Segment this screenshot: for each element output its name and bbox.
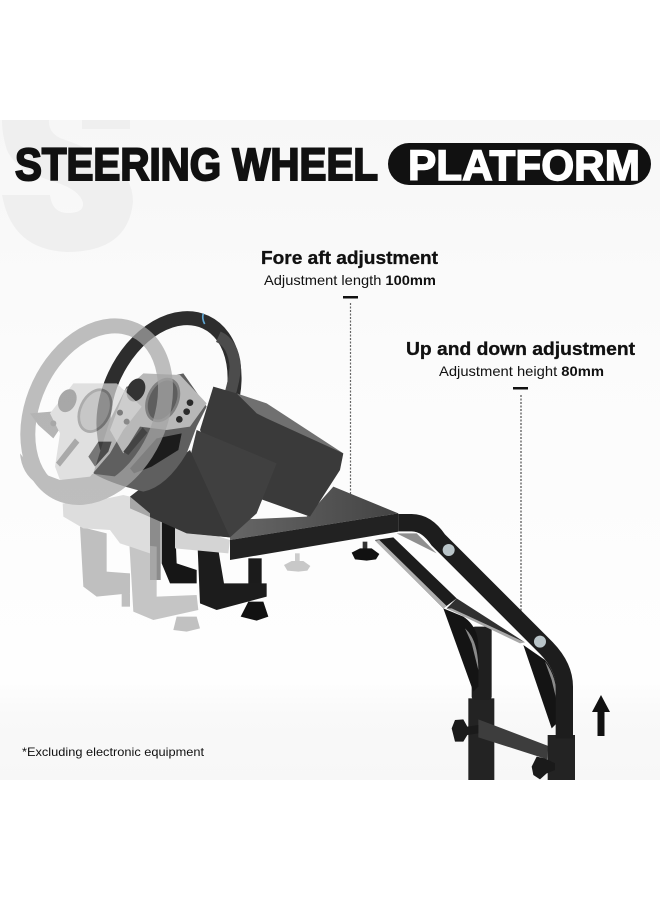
ghost base — [63, 495, 150, 553]
callout: fore aft adjustment: Adjustment length 100mm — [264, 272, 436, 288]
dark wheel hub — [93, 373, 207, 492]
callout: fore aft adjustment — [261, 248, 438, 500]
background panel — [0, 120, 660, 780]
ghost wheel — [1, 303, 200, 632]
motor housing — [130, 387, 343, 537]
rim highlights — [203, 313, 235, 417]
bolts — [443, 544, 546, 648]
ghost rim — [1, 303, 192, 520]
callout: fore aft adjustment: Fore aft adjustment — [261, 248, 438, 268]
ghost clamps — [80, 527, 200, 632]
heading pill: platform: PLATFORM — [408, 142, 640, 190]
footnote: *Excluding electronic equipment — [22, 745, 205, 759]
arrow: upward — [592, 695, 610, 736]
dark clamps — [150, 513, 268, 621]
title — [15, 139, 651, 190]
ghost hub — [20, 383, 142, 503]
heading: steering wheel: STEERING WHEEL — [15, 139, 378, 190]
platform and frame — [230, 487, 575, 780]
platform plate — [230, 487, 398, 560]
steering wheel — [1, 297, 343, 632]
callout: up and down adjustment — [406, 339, 635, 612]
dark wheel rim — [78, 297, 260, 505]
upper arm — [398, 523, 564, 738]
callout: up and down adjustment: Adjustment height 80mm — [439, 363, 604, 379]
lower arm and cross plate — [375, 533, 525, 643]
knobs — [284, 542, 555, 779]
callout: up and down adjustment: Up and down adjustment — [406, 339, 635, 359]
rear sleeve and crossbar — [443, 608, 575, 780]
